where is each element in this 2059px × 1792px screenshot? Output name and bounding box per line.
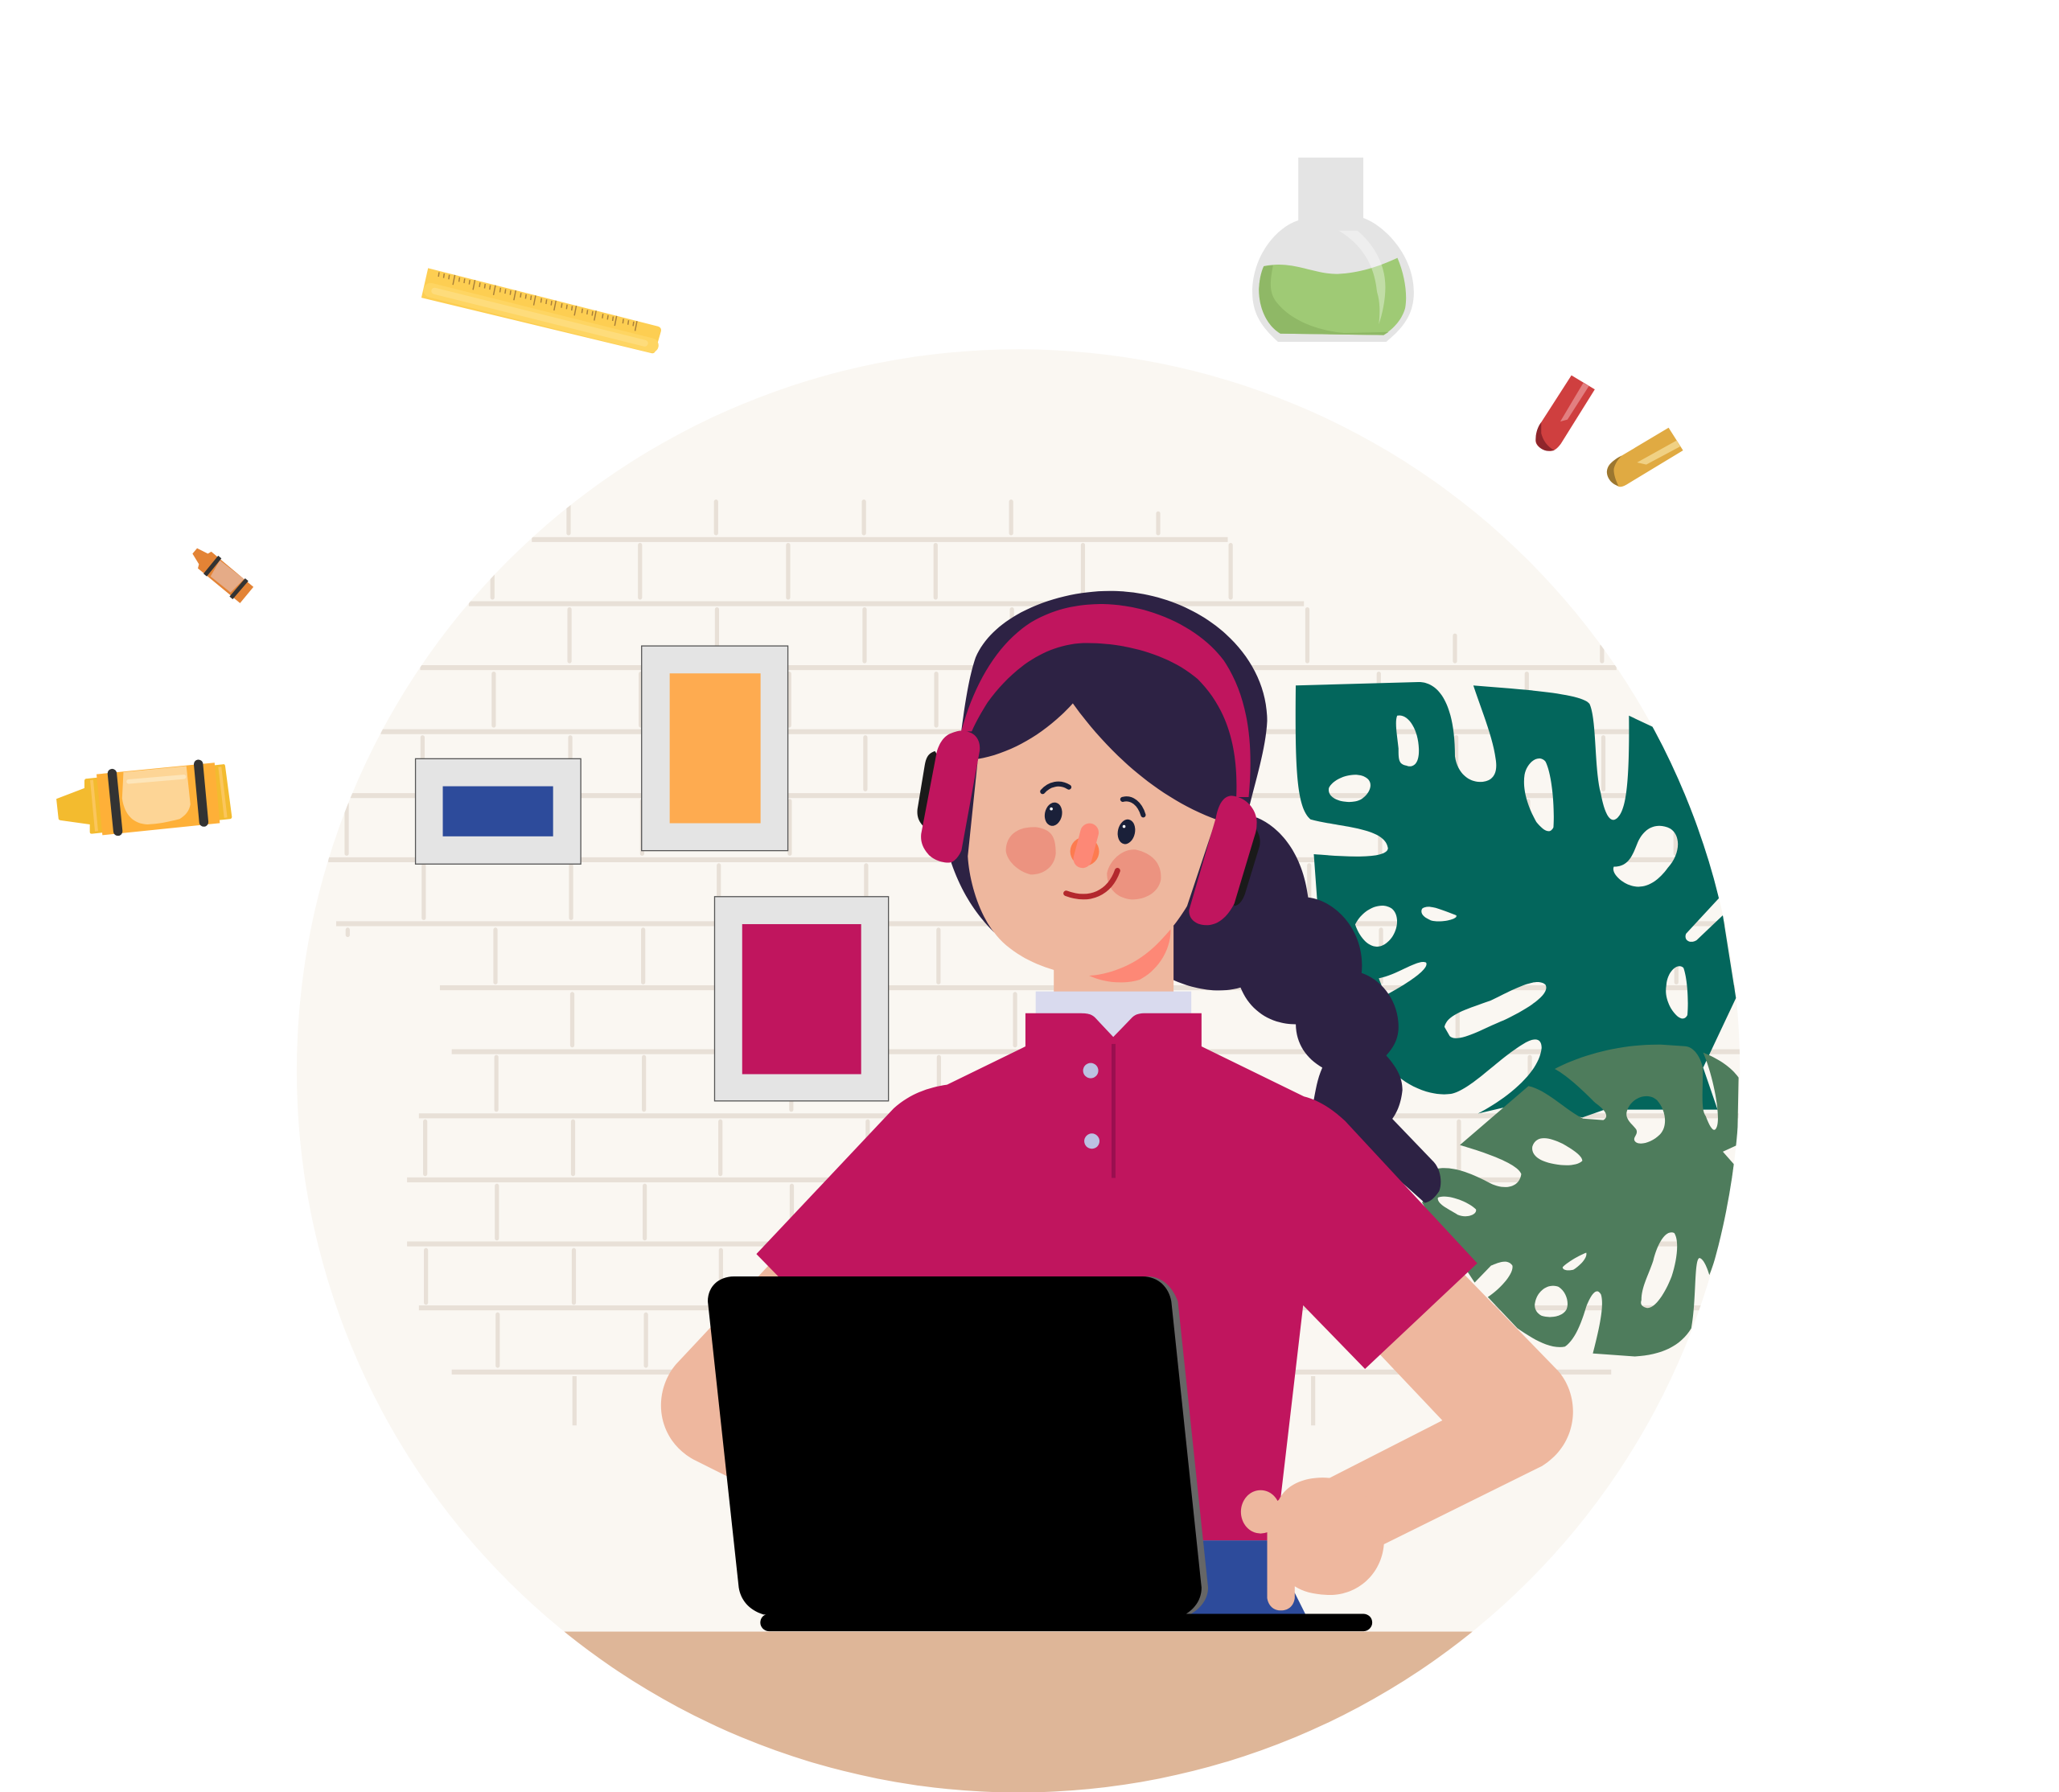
illustration <box>56 158 1740 1792</box>
large yellow crayon <box>56 762 232 835</box>
hand and thumb <box>1241 1478 1392 1610</box>
picture frame: magenta <box>714 897 889 1101</box>
light monstera leaf <box>1422 1045 1739 1357</box>
trousers <box>1156 1540 1305 1614</box>
yellow test tube <box>1607 428 1683 487</box>
shirt button 1 <box>1083 1063 1099 1079</box>
dark monstera leaf <box>1296 682 1736 1117</box>
hair back and braid <box>1173 817 1440 1203</box>
face <box>968 703 1216 976</box>
shirt <box>756 1013 1477 1540</box>
woman figure <box>661 591 1573 1614</box>
headphones <box>918 604 1260 925</box>
laptop base <box>760 1614 1372 1631</box>
right cheek <box>1107 849 1161 899</box>
brick wall <box>328 502 1740 1425</box>
neck shadow <box>1088 928 1171 982</box>
right arm <box>1330 1254 1573 1544</box>
background circle <box>297 349 1740 1792</box>
plant leaves <box>1296 682 1739 1357</box>
laptop lid <box>708 1276 1202 1614</box>
flask liquid shadow <box>1259 265 1389 335</box>
ruler <box>421 268 661 353</box>
right ear cup <box>1189 795 1257 925</box>
flask liquid <box>1259 258 1406 335</box>
small crayon bands <box>205 557 247 598</box>
picture frame: orange <box>642 646 788 851</box>
right ear cup back <box>1221 828 1260 906</box>
small orange crayon <box>192 549 253 603</box>
undershirt collar <box>1036 992 1191 1044</box>
left cheek <box>1006 827 1056 874</box>
left eye <box>1042 801 1064 828</box>
nose <box>1071 832 1099 866</box>
flask <box>1252 158 1414 342</box>
shirt placket <box>1112 1044 1116 1178</box>
shirt button 2 <box>1084 1133 1099 1149</box>
right eye <box>1116 818 1137 846</box>
headband <box>961 604 1251 797</box>
laptop edge <box>722 1276 1208 1614</box>
red test tube <box>1535 376 1595 451</box>
eyebrows <box>1042 784 1143 815</box>
laptop <box>708 1276 1372 1631</box>
neck <box>1054 906 1173 993</box>
left ear cup back <box>918 751 959 826</box>
hair dome <box>951 591 1268 946</box>
left arm <box>661 1245 840 1476</box>
picture frame: blue <box>416 758 581 864</box>
left ear cup <box>921 731 980 862</box>
flask highlight <box>1338 231 1385 324</box>
crayon bands <box>112 764 203 831</box>
smile <box>1066 870 1117 897</box>
ruler tick marks <box>438 272 637 331</box>
table <box>565 1631 1473 1792</box>
